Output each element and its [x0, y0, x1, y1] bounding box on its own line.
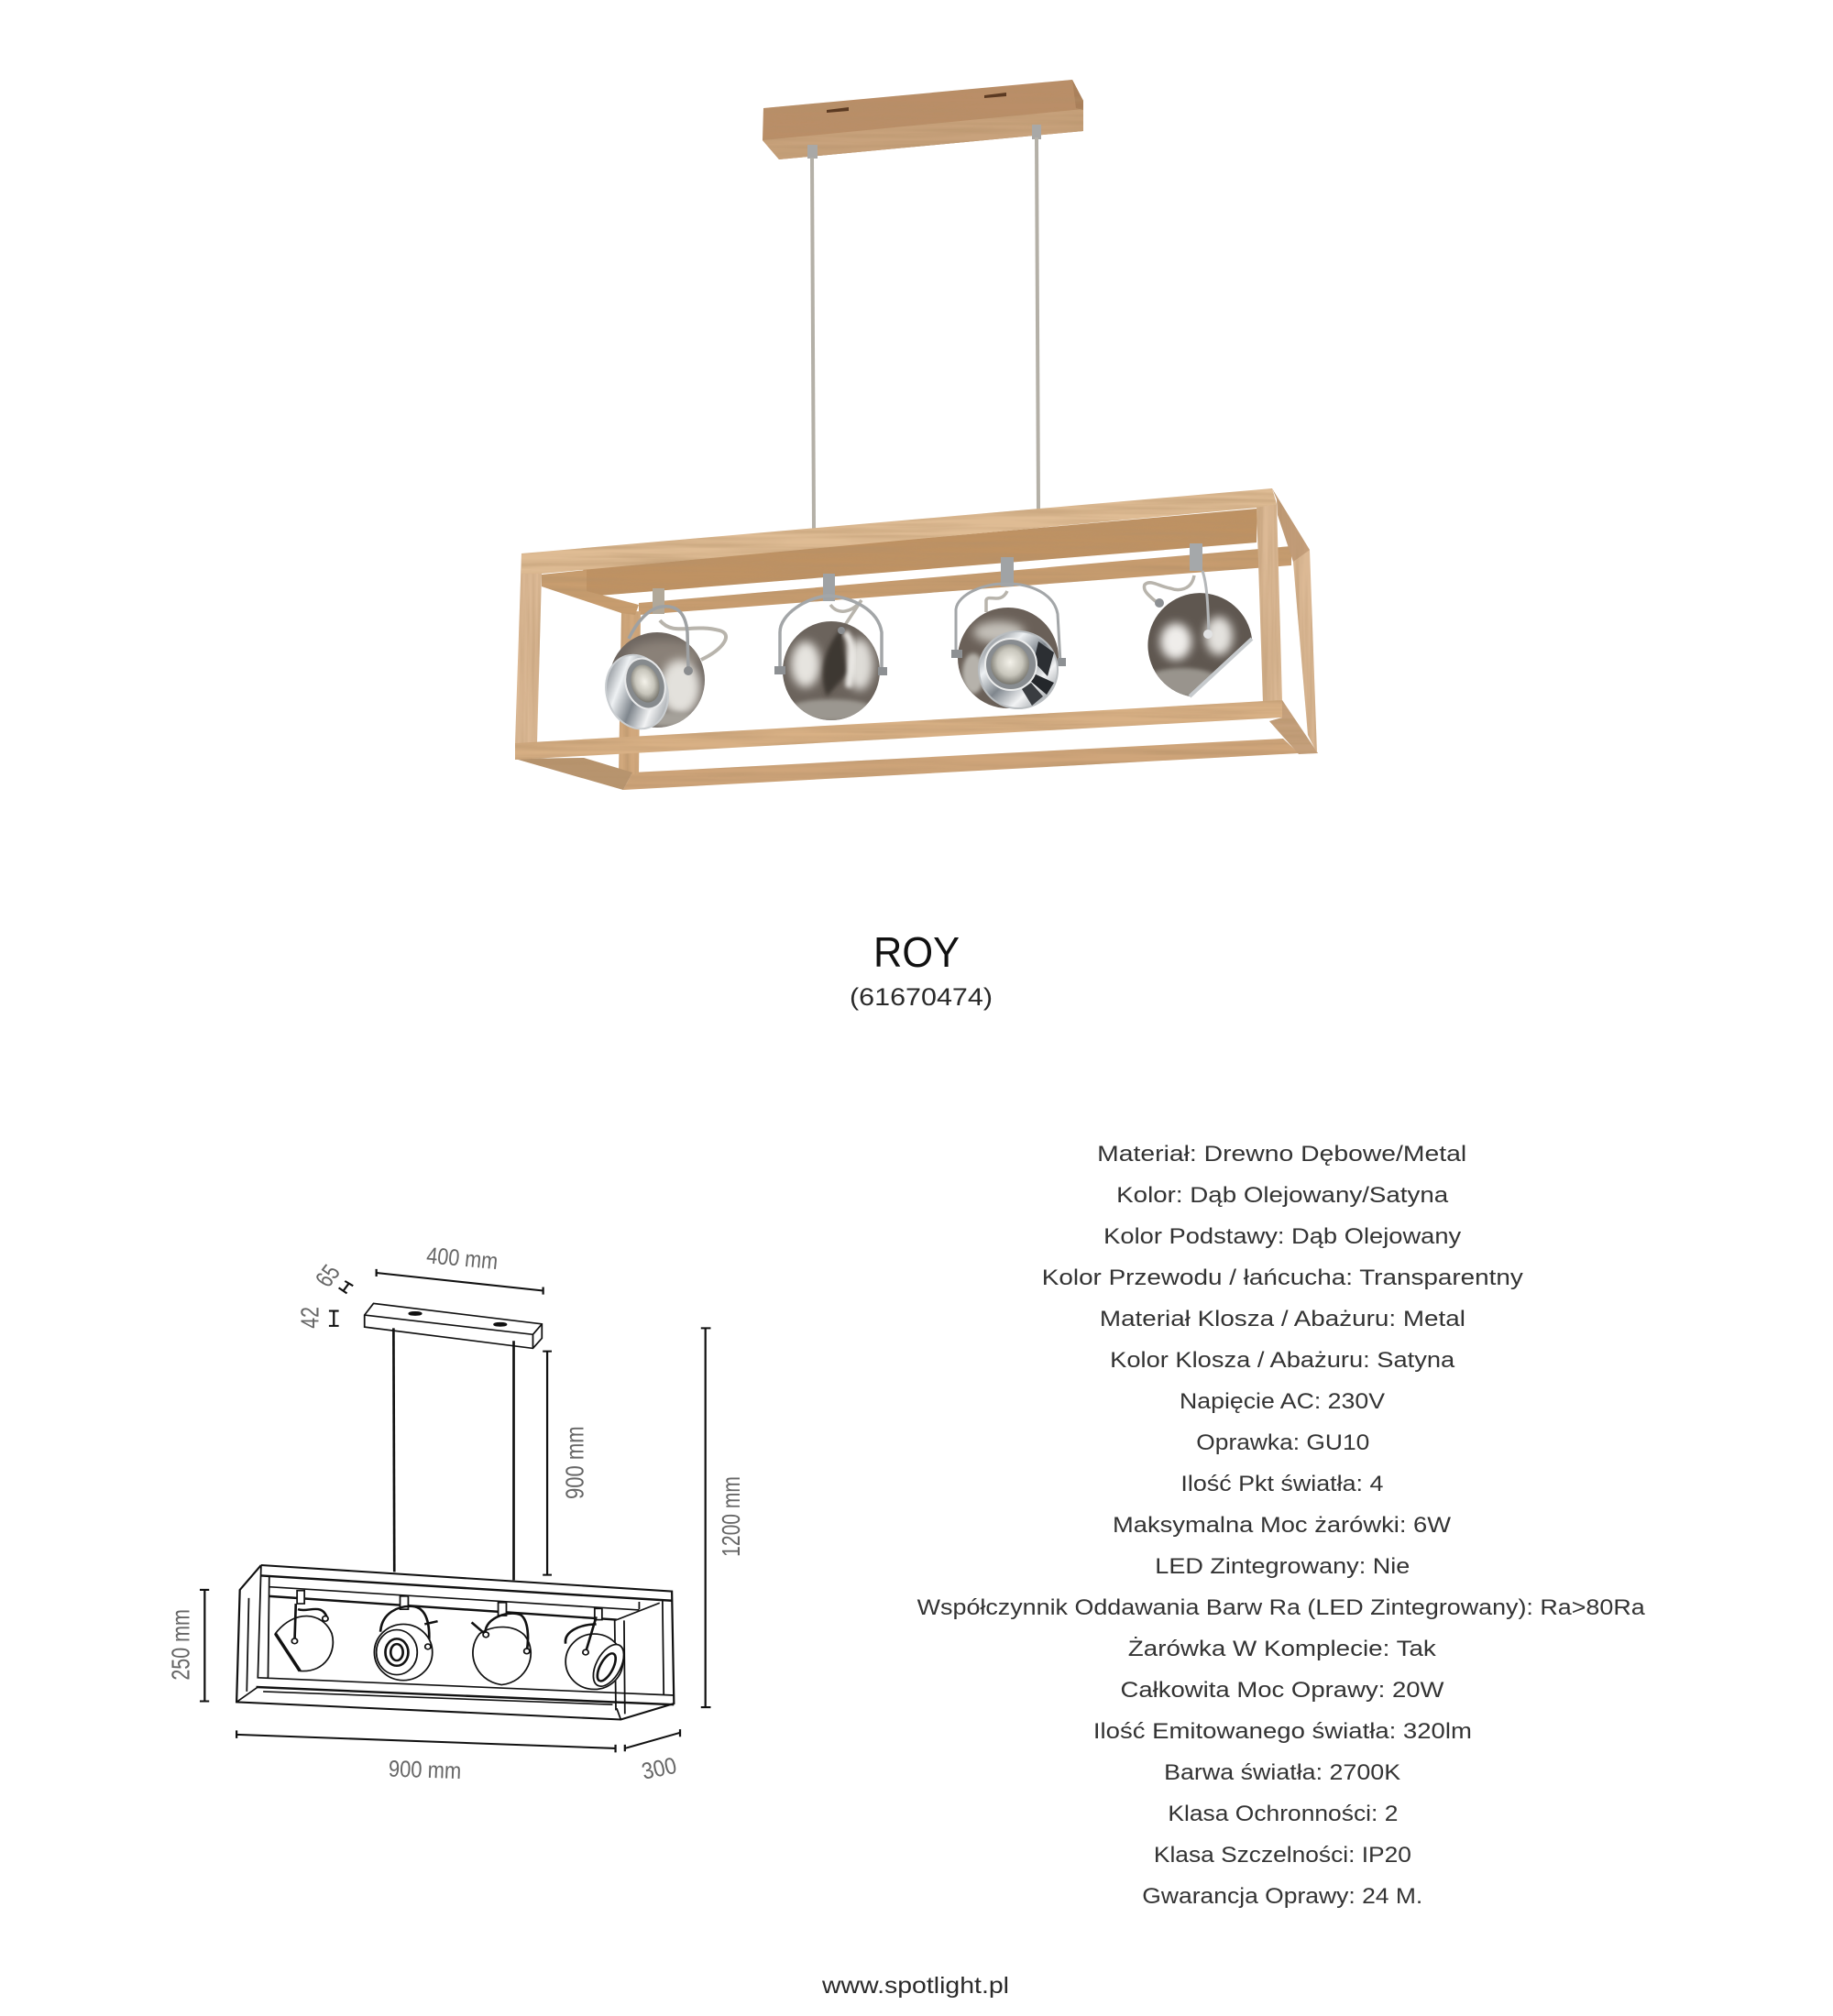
drawing: spot 1: [275, 1591, 333, 1671]
spec: socket: Oprawka: GU10: [1196, 1430, 1369, 1455]
technical drawing with dimensions: [166, 1242, 745, 1784]
canopy slots: [827, 93, 1006, 113]
spotlight 4: [1144, 543, 1252, 697]
dimension line: 400: [377, 1269, 543, 1295]
label: 900 mm height: 900 mm: [560, 1426, 589, 1499]
drawing: spot 4: [565, 1608, 630, 1691]
label: 300: 300: [639, 1752, 679, 1784]
dimension line: 900 width: [236, 1730, 616, 1752]
spec: luminous flux: Ilość Emitowanego światła: 320lm: [1093, 1719, 1472, 1744]
suspension cables: [807, 125, 1041, 530]
back frame rails: [623, 546, 1299, 790]
spec: integrated LED: LED Zintegrowany: Nie: [1155, 1554, 1410, 1579]
drawing: spot 2: [374, 1596, 438, 1681]
drawing: frame: [236, 1565, 674, 1720]
line drawing of lamp: [236, 1303, 674, 1720]
dimension labels: [166, 1242, 745, 1784]
spotlight 3: [951, 557, 1066, 708]
spec: total power: Całkowita Moc Oprawy: 20W: [1120, 1678, 1444, 1703]
label: 1200 mm: 1200 mm: [717, 1476, 745, 1557]
dimension lines: [200, 1269, 710, 1752]
label: 400 mm: 400 mm: [425, 1242, 499, 1275]
dimension line: 300: [625, 1729, 680, 1751]
inner top beam and corners: [515, 509, 1318, 790]
website footer: www.spotlight.pl: [821, 1973, 1009, 1999]
spotlight 2: [774, 574, 887, 721]
label: 900 mm width: 900 mm: [388, 1756, 462, 1784]
drawing: canopy: [365, 1303, 542, 1348]
front frame posts: [515, 504, 1282, 743]
drawing: cables: [393, 1328, 514, 1580]
right side frame: [1272, 488, 1317, 753]
dimension line: 250: [200, 1590, 209, 1702]
spec: CRI: Współczynnik Oddawania Barw Ra (LED Zintegrowany): Ra>80Ra: [917, 1595, 1645, 1620]
spec: bulb included: Żarówka W Komplecie: Tak: [1128, 1637, 1437, 1661]
spec: material: Materiał: Drewno Dębowe/Metal: [1097, 1142, 1466, 1167]
dimension line: 1200: [701, 1328, 710, 1707]
spec: shade colour: Kolor Klosza / Abażuru: Satyna: [1110, 1348, 1455, 1373]
ceiling canopy: [763, 80, 1083, 159]
title: ROY: [873, 928, 960, 976]
spec: protection class: Klasa Ochronności: 2: [1168, 1802, 1398, 1826]
dimension line: 42: [329, 1311, 339, 1326]
spec: voltage: Napięcie AC: 230V: [1180, 1389, 1385, 1414]
spec: colour: Kolor: Dąb Olejowany/Satyna: [1116, 1183, 1449, 1208]
spec: light points: Ilość Pkt światła: 4: [1180, 1472, 1383, 1496]
spec: colour temperature: Barwa światła: 2700K: [1164, 1760, 1400, 1785]
drawing: spot 3: [472, 1603, 531, 1685]
dimension line: 65: [339, 1281, 353, 1293]
label: 42: 42: [295, 1307, 324, 1329]
label: 65: 65: [310, 1260, 346, 1292]
label: 250 mm: 250 mm: [166, 1609, 195, 1681]
front frame beams: [515, 488, 1282, 760]
spotlight 1: [597, 588, 726, 737]
spec: warranty: Gwarancja Oprawy: 24 M.: [1142, 1884, 1422, 1909]
product code: (61670474): [850, 983, 993, 1011]
dimension line: 900 cable: [543, 1352, 552, 1575]
spec: base colour: Kolor Podstawy: Dąb Olejowany: [1103, 1224, 1461, 1249]
spec: cable colour: Kolor Przewodu / łańcucha: Transparentny: [1042, 1265, 1523, 1290]
back left post: [619, 611, 641, 774]
product photo: pendant lamp: [515, 80, 1318, 790]
spec: max bulb power: Maksymalna Moc żarówki: 6W: [1113, 1513, 1451, 1538]
spec: IP rating: Klasa Szczelności: IP20: [1154, 1843, 1411, 1868]
specification list: [917, 1142, 1645, 1909]
spec: shade material: Materiał Klosza / Abażuru: Metal: [1100, 1307, 1465, 1331]
